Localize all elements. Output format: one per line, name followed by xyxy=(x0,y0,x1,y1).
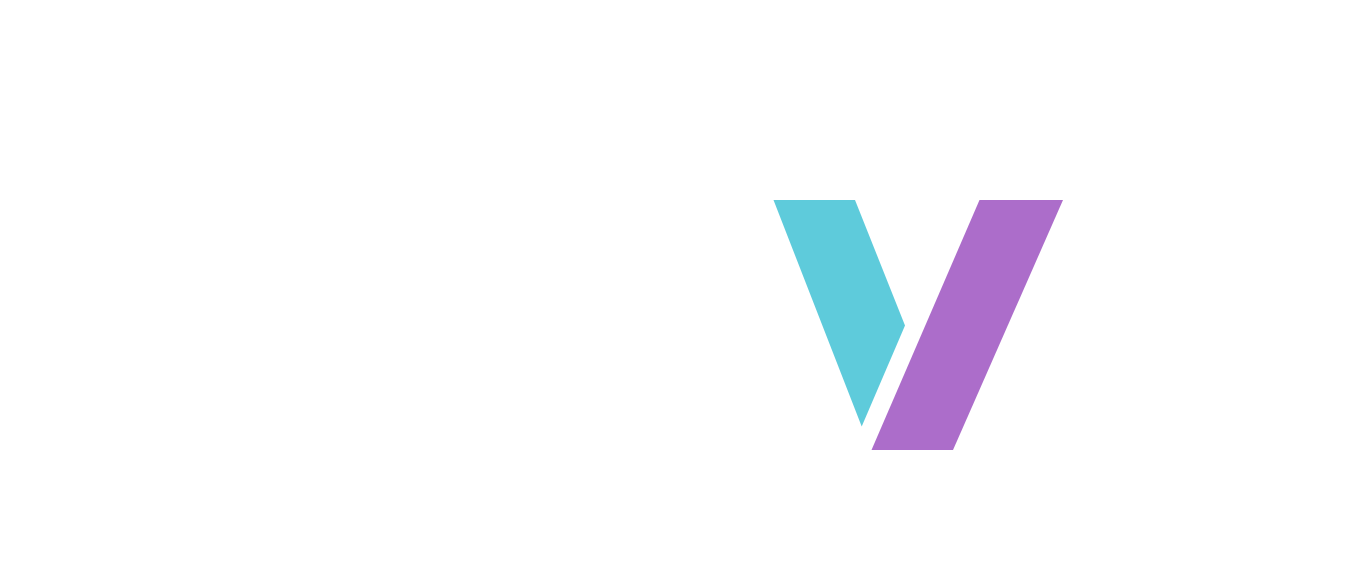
icon: purple right stroke of V xyxy=(872,200,1063,450)
icon: teal left stroke of V xyxy=(774,200,905,426)
